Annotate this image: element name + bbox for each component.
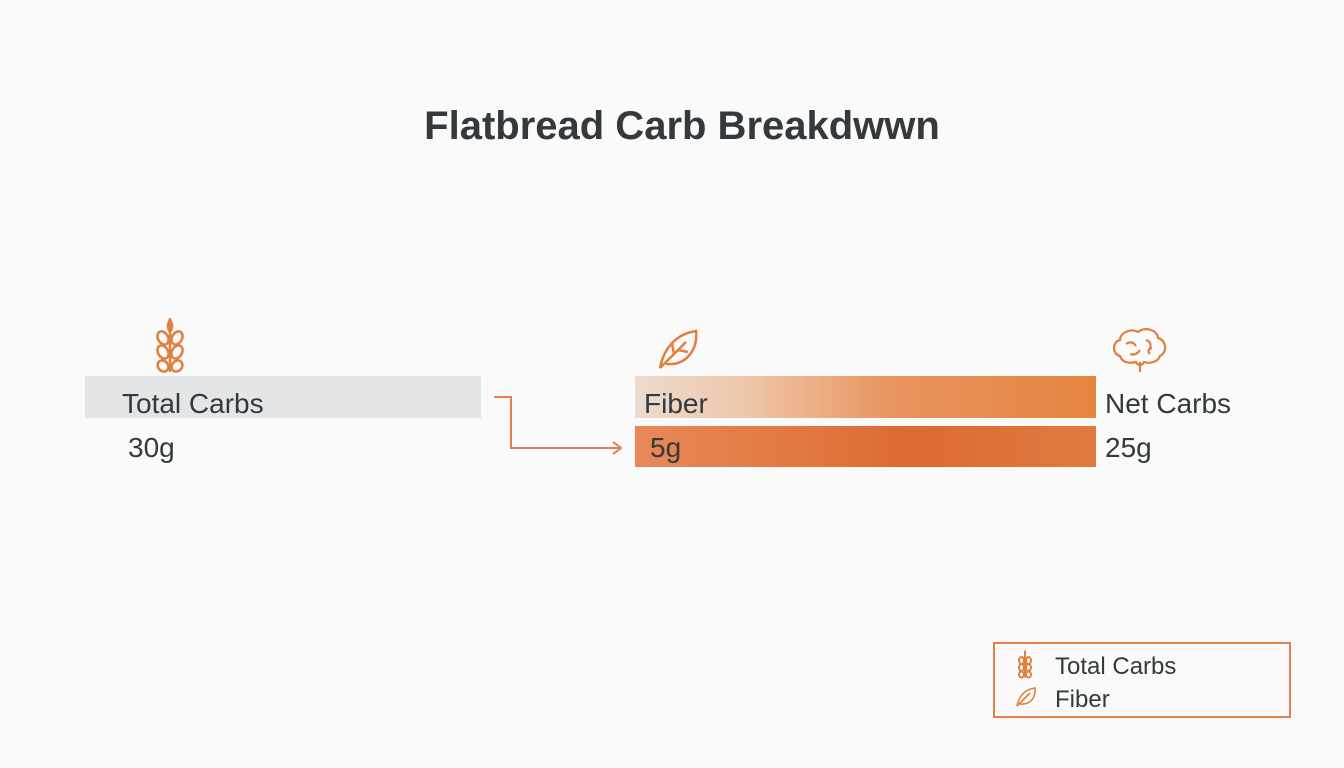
bar: fiber: [635, 376, 1096, 418]
icon: brain: [1112, 328, 1166, 372]
legend text: fiber: Fiber: [1055, 686, 1110, 713]
legend icon: wheat: [1018, 650, 1032, 678]
bar: net carbs: [635, 426, 1096, 467]
icon: leaf: [658, 330, 698, 369]
label: net carbs: Net Carbs: [1105, 388, 1231, 419]
label: fiber: Fiber: [644, 388, 708, 419]
title: Flatbread Carb Breakdwwn: [424, 104, 940, 148]
legend: [993, 642, 1291, 718]
value: 30g: 30g: [128, 432, 175, 463]
icon: wheat: [156, 318, 184, 373]
value: 5g: 5g: [650, 432, 681, 463]
value: 25g: 25g: [1105, 432, 1152, 463]
legend text: total carbs: Total Carbs: [1055, 653, 1176, 680]
bar: total carbs: [85, 376, 481, 418]
arrow: [494, 396, 622, 455]
label: total carbs: Total Carbs: [122, 388, 264, 419]
legend icon: leaf: [1016, 687, 1036, 707]
